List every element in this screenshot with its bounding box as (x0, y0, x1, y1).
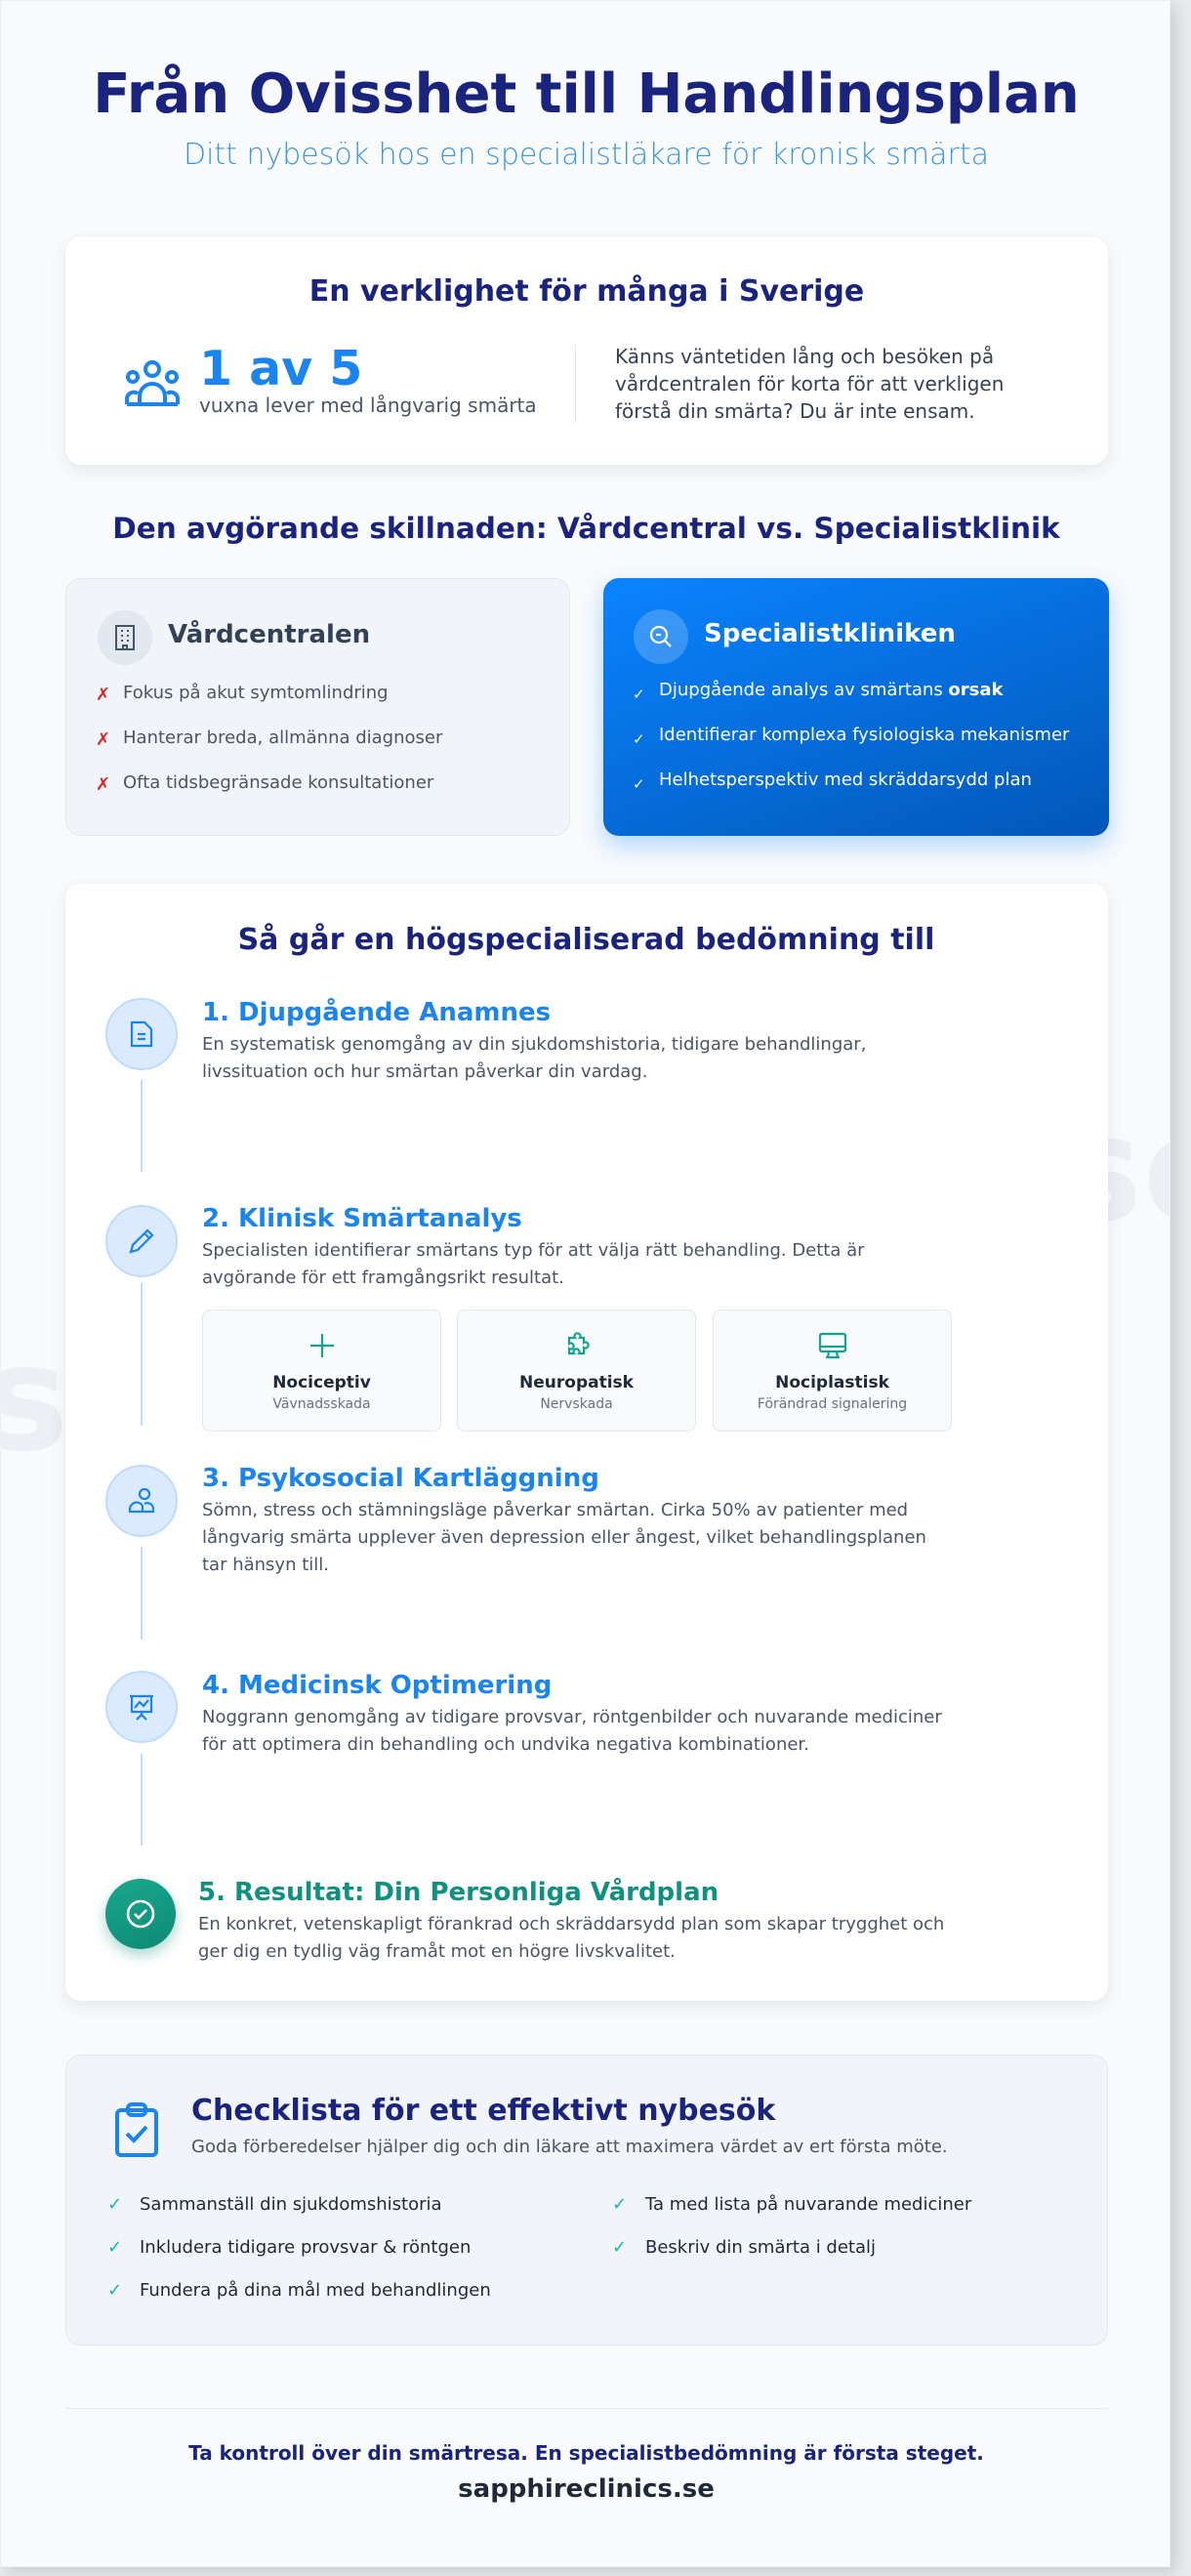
box: nociceptiv: Vävnadsskada (272, 1396, 371, 1412)
panel: vårdcentralen (65, 578, 570, 836)
step 1: En systematisk genomgång av din sjukdomshistoria, tidigare behandlingar, livssituation och hur smärtan påverkar din vardag. (202, 1034, 866, 1082)
list: checklist items: Ta med lista på nuvarande mediciner (645, 2194, 971, 2215)
subtitle: Ditt nybesök hos en specialistläkare för kronisk smärta (184, 138, 989, 172)
list: specialistkliniken: Helhetsperspektiv med skräddarsydd plan (659, 769, 1032, 790)
list: checklist items: ✓ (107, 2194, 122, 2215)
list: checklist items: Sammanställ din sjukdomshistoria (140, 2194, 442, 2215)
list: specialistkliniken (633, 680, 1070, 793)
list: specialistkliniken: Identifierar komplexa fysiologiska mekanismer (659, 725, 1069, 745)
heading: comparison: Den avgörande skillnaden: Vårdcentral vs. Specialistklinik (112, 512, 1060, 545)
step 2 (105, 1204, 865, 1426)
box: neuropatisk (457, 1309, 696, 1432)
icon: users (125, 360, 180, 406)
list: checklist items: Inkludera tidigare provsvar & röntgen (140, 2237, 471, 2258)
box: neuropatisk: Neuropatisk (519, 1373, 634, 1392)
list: specialistkliniken: ✓ (633, 775, 645, 793)
heading: process: Så går en högspecialiserad bedömning till (238, 923, 934, 957)
footer tagline: Ta kontroll över din smärtresa. En specialistbedömning är första steget. (188, 2441, 984, 2465)
heading: checklist: Checklista för ett effektivt nybesök (191, 2094, 775, 2128)
step 5: En konkret, vetenskapligt förankrad och skräddarsydd plan som skapar trygghet och ger dig en tydlig väg framåt mot en högre livskvalitet. (198, 1914, 944, 1962)
list: checklist items: Beskriv din smärta i detalj (645, 2237, 876, 2258)
list: vårdcentralen: ✗ (96, 685, 110, 705)
icon: person (105, 1465, 178, 1537)
icon: document (105, 998, 178, 1070)
footer url: sapphireclinics.se (458, 2474, 715, 2504)
stat number: 1 av 5 (199, 341, 362, 396)
panel: checklist (65, 2055, 1108, 2346)
list: specialistkliniken: ✓ (633, 686, 645, 703)
subtitle: checklist: Goda förberedelser hjälper dig och din läkare att maximera värdet av ert första möte. (191, 2137, 948, 2157)
box: nociceptiv (202, 1309, 441, 1432)
list: vårdcentralen (96, 683, 443, 795)
list: checklist items: Fundera på dina mål med behandlingen (140, 2280, 491, 2301)
list: vårdcentralen: Fokus på akut symtomlindring (123, 683, 389, 703)
box: neuropatisk: Nervskada (540, 1396, 613, 1412)
step 1 (105, 998, 866, 1172)
list: checklist items: ✓ (107, 2237, 122, 2258)
list: vårdcentralen: ✗ (96, 774, 110, 795)
stat label: vuxna lever med långvarig smärta (199, 394, 537, 417)
heading: statistic: En verklighet för många i Sverige (309, 274, 864, 309)
list: vårdcentralen: Hanterar breda, allmänna diagnoser (123, 727, 442, 748)
list: specialistkliniken: Djupgående analys av smärtans orsak (659, 680, 1004, 700)
step 5: 5. Resultat: Din Personliga Vårdplan (198, 1878, 719, 1907)
icon: search (634, 609, 688, 664)
box: nociceptiv: Nociceptiv (272, 1373, 371, 1392)
step 4: 4. Medicinsk Optimering (202, 1671, 552, 1700)
step 2: Specialisten identifierar smärtans typ för att välja rätt behandling. Detta är avgörande för ett framgångsrikt resultat. (202, 1240, 865, 1288)
box: nociplastisk: Förändrad signalering (758, 1396, 907, 1412)
text: intro: Känns väntetiden lång och besöken på vårdcentralen för korta för att verkligen förstå din smärta? Du är inte ensam. (615, 345, 1004, 423)
icon: building (98, 610, 152, 665)
heading: vårdcentralen: Vårdcentralen (168, 620, 370, 649)
step 3 (105, 1464, 926, 1640)
list: checklist items: ✓ (107, 2280, 122, 2301)
step 4: Noggrann genomgång av tidigare provsvar, röntgenbilder och nuvarande mediciner för att optimera din behandling och undvika negativa kombinationer. (202, 1707, 942, 1755)
box: nociplastisk: Nociplastisk (775, 1373, 889, 1392)
step 3: 3. Psykosocial Kartläggning (202, 1464, 599, 1493)
icon: clipboard (115, 2102, 158, 2157)
heading: specialistkliniken: Specialistkliniken (704, 619, 956, 648)
list: checklist items: ✓ (612, 2194, 627, 2215)
step 1: 1. Djupgående Anamnes (202, 998, 551, 1027)
list: checklist items (107, 2194, 972, 2301)
panel: specialistkliniken (603, 578, 1109, 836)
panel: process (65, 884, 1108, 2001)
list: checklist items: ✓ (612, 2237, 627, 2258)
step 2: 2. Klinisk Smärtanalys (202, 1204, 522, 1233)
icon: presentation chart (105, 1671, 178, 1743)
title: Från Ovisshet till Handlingsplan (93, 62, 1080, 126)
box: nociplastisk (713, 1309, 952, 1432)
icon: pencil (105, 1205, 178, 1277)
list: specialistkliniken: ✓ (633, 730, 645, 748)
icon: check circle (105, 1879, 176, 1949)
panel: statistic (65, 237, 1108, 465)
step 5 (98, 1877, 944, 1963)
step 4 (105, 1671, 942, 1846)
list: vårdcentralen: ✗ (96, 729, 110, 750)
step 3: Sömn, stress och stämningsläge påverkar smärtan. Cirka 50% av patienter med långvarig smärta upplever även depression eller ångest, vilket behandlingsplanen tar hänsyn till. (202, 1500, 926, 1575)
list: vårdcentralen: Ofta tidsbegränsade konsultationer (123, 772, 433, 793)
